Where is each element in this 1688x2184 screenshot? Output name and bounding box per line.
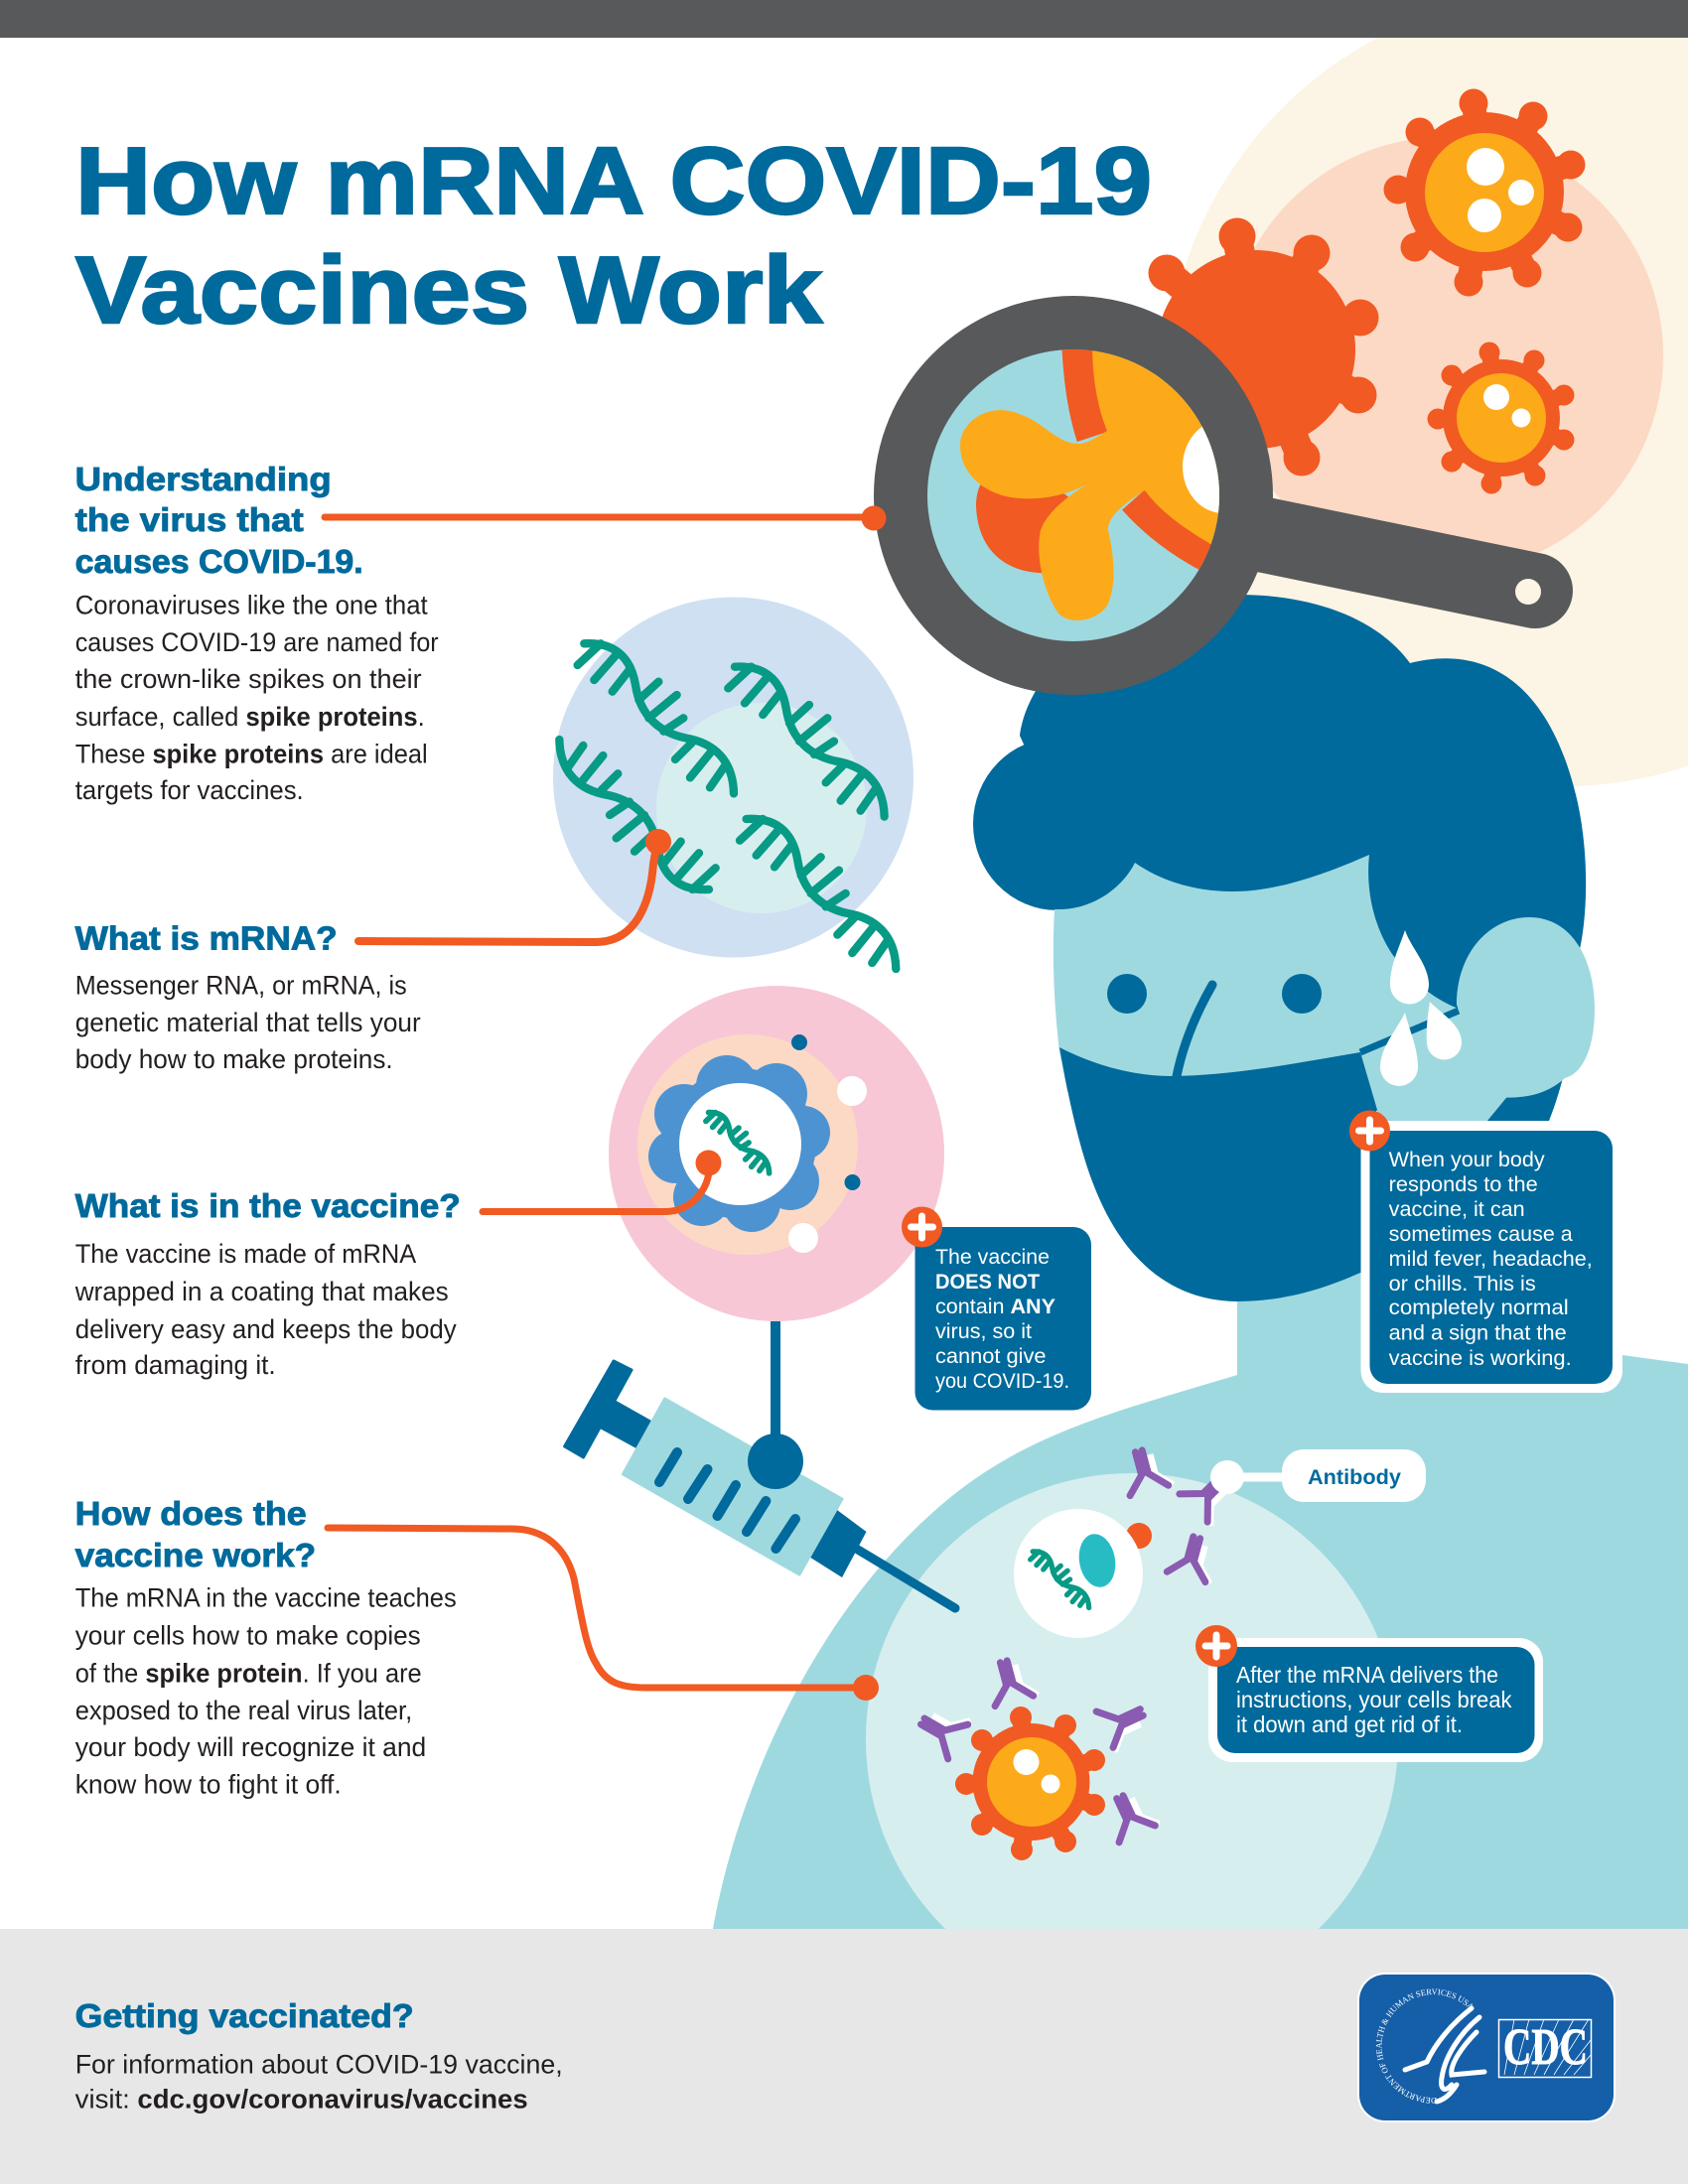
body text: The mRNA in the vaccine teaches xyxy=(75,1582,457,1612)
body and shoulders xyxy=(713,1271,1688,1929)
connector arrow to magnifier xyxy=(325,506,886,530)
body text: exposed to the real virus later, xyxy=(75,1696,412,1725)
body text: delivery easy and keeps the body xyxy=(75,1314,457,1344)
callout: body response: or chills. This is xyxy=(1389,1273,1536,1296)
plus icon xyxy=(1196,1625,1237,1667)
virus: middle right xyxy=(1438,352,1564,483)
background circles xyxy=(1166,0,1688,786)
hand xyxy=(1457,917,1595,1098)
body text: These spike proteins are ideal xyxy=(75,739,428,768)
plus icon xyxy=(1349,1110,1390,1152)
callout: body response: vaccine, it can xyxy=(1389,1198,1525,1221)
body text xyxy=(75,971,421,1074)
callout: body response: and a sign that the xyxy=(1389,1322,1567,1344)
callout: cells break it down: After the mRNA delivers the xyxy=(1236,1662,1498,1688)
mask strap xyxy=(1360,1011,1459,1052)
HHS eagle xyxy=(1405,2008,1484,2102)
handle hole xyxy=(1515,579,1541,605)
CDC mark: CDC xyxy=(1503,2019,1588,2076)
magnifying glass xyxy=(874,296,1541,695)
callout: cells break it down xyxy=(1196,1625,1543,1762)
callout: cells break it down: it down and get rid of it. xyxy=(1236,1711,1463,1737)
body text: your cells how to make copies xyxy=(75,1620,421,1650)
collar and needle xyxy=(804,1504,866,1577)
heading: What is mRNA? xyxy=(75,919,338,957)
body text: causes COVID-19 are named for xyxy=(75,627,439,657)
body text: your body will recognize it and xyxy=(75,1732,426,1762)
connector arrow to particle xyxy=(483,1150,721,1211)
illustration: syringe xyxy=(565,1361,955,1608)
callout: vaccine does not contain virus: DOES NOT xyxy=(935,1271,1040,1294)
virus: large, behind magnifier xyxy=(1157,236,1360,458)
person head xyxy=(973,595,1595,1301)
body text: Coronaviruses like the one that xyxy=(75,590,428,619)
heading: vaccine work? xyxy=(75,1537,316,1573)
body text: genetic material that tells your xyxy=(75,1008,421,1037)
callout: vaccine does not contain virus: The vaccine xyxy=(935,1246,1050,1269)
heading: How does the xyxy=(75,1495,307,1532)
barrel xyxy=(624,1399,842,1574)
footer text xyxy=(75,2049,563,2115)
illustration: mRNA strands circle xyxy=(553,598,914,969)
footer panel xyxy=(0,1929,1688,2184)
body text xyxy=(75,590,439,805)
callout: body response: vaccine is working. xyxy=(1389,1347,1572,1370)
body text: The vaccine is made of mRNA xyxy=(75,1239,416,1269)
top bar xyxy=(0,0,1688,38)
body text: body how to make proteins. xyxy=(75,1044,393,1074)
heading: causes COVID-19. xyxy=(75,543,363,580)
tears xyxy=(1380,930,1462,1086)
callout: vaccine does not contain virus: you COVID-19. xyxy=(935,1370,1069,1393)
title: Vaccines Work xyxy=(75,237,823,343)
callout: vaccine does not contain virus: contain ANY xyxy=(935,1296,1055,1318)
callout: body response: completely normal xyxy=(1389,1297,1569,1319)
illustration: cell with mRNA xyxy=(1014,1509,1152,1638)
callout: body response: sometimes cause a xyxy=(1389,1223,1573,1246)
antibody label xyxy=(1210,1449,1426,1502)
body text: Messenger RNA, or mRNA, is xyxy=(75,971,407,1001)
heading: the virus that xyxy=(75,501,304,538)
body text: know how to fight it off. xyxy=(75,1769,342,1799)
ball xyxy=(748,1433,803,1489)
body text: surface, called spike proteins. xyxy=(75,702,425,732)
footer text: visit: cdc.gov/coronavirus/vaccines xyxy=(75,2085,528,2115)
nose xyxy=(1177,985,1212,1076)
face xyxy=(1054,855,1459,1092)
antibodies xyxy=(913,1445,1239,1843)
body text: targets for vaccines. xyxy=(75,775,304,805)
CDC logo xyxy=(1357,1973,1616,2122)
hair xyxy=(973,595,1586,1121)
title: How mRNA COVID-19 xyxy=(75,128,1152,234)
section: understanding the virus xyxy=(75,461,886,805)
callout: vaccine does not contain virus: virus, so it xyxy=(935,1320,1032,1343)
virus: bottom with antibodies xyxy=(966,1717,1094,1849)
connector arrow to pale circle xyxy=(328,1528,879,1701)
heading: What is in the vaccine? xyxy=(75,1187,461,1224)
lipid coating xyxy=(648,1055,830,1232)
heading xyxy=(75,1495,316,1573)
footer text: For information about COVID-19 vaccine, xyxy=(75,2049,563,2079)
callout: body response: mild fever, headache, xyxy=(1389,1248,1593,1271)
connector from particle to syringe xyxy=(771,1321,780,1440)
plunger xyxy=(565,1361,632,1457)
footer heading: Getting vaccinated? xyxy=(75,1997,414,2034)
antibody label: Antibody xyxy=(1308,1466,1401,1489)
section: how does the vaccine work xyxy=(75,1495,879,1799)
mask xyxy=(1059,1047,1390,1301)
connector arrow to mRNA xyxy=(358,829,671,942)
callout: body response: responds to the xyxy=(1389,1173,1538,1196)
body text: of the spike protein. If you are xyxy=(75,1658,422,1688)
title xyxy=(75,128,1152,343)
section: what is mRNA xyxy=(75,829,671,1074)
virus: top right xyxy=(1398,103,1571,282)
callout: body response: When your body xyxy=(1389,1149,1545,1171)
section: what is in the vaccine xyxy=(74,1150,721,1380)
body text xyxy=(74,1239,457,1380)
handle xyxy=(1241,530,1535,591)
eyes xyxy=(1107,974,1322,1014)
body text: the crown-like spikes on their xyxy=(75,664,422,694)
HHS seal text: DEPARTMENT OF HEALTH & HUMAN SERVICES USA xyxy=(1376,1989,1473,2104)
heading: Understanding xyxy=(75,461,332,497)
magnified spike protein xyxy=(927,349,1219,641)
callout: vaccine does not contain virus xyxy=(902,1207,1091,1410)
callout: vaccine does not contain virus: cannot give xyxy=(935,1345,1047,1368)
body text xyxy=(75,1582,457,1799)
tick marks xyxy=(659,1452,795,1549)
arm xyxy=(1360,1003,1519,1127)
callout: body response xyxy=(1349,1110,1622,1393)
body text: from damaging it. xyxy=(75,1350,276,1380)
body text: wrapped in a coating that makes xyxy=(74,1277,449,1306)
plus icon xyxy=(902,1207,942,1247)
heading xyxy=(75,461,363,580)
illustration: vaccine particle circle xyxy=(609,986,944,1321)
callout: cells break it down: instructions, your cells break xyxy=(1236,1687,1512,1712)
inner pale circle xyxy=(866,1473,1397,1929)
